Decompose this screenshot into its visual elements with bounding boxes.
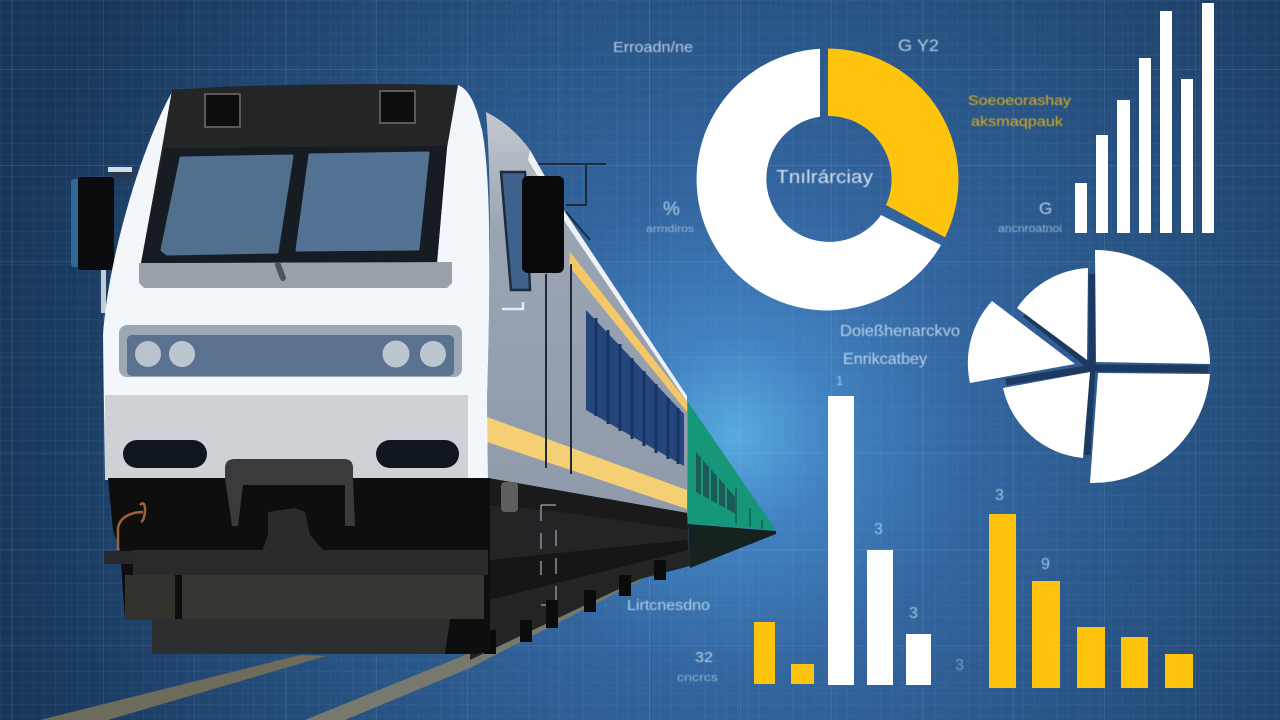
label: percent left of donut: %	[663, 199, 680, 220]
bar value labels: 3	[995, 487, 1004, 504]
donut chart	[697, 48, 958, 310]
train illustration	[71, 84, 776, 660]
bar value labels: 3	[874, 521, 883, 538]
yellow callout: Soeoeorashay	[968, 92, 1071, 108]
label: bottom value: 32	[695, 649, 713, 666]
donut: yellow segment	[828, 48, 958, 237]
label: left of top bar chart: G	[1039, 199, 1052, 218]
windscreen panel	[139, 84, 458, 288]
donut centre label: Tnılrárciay	[776, 167, 873, 187]
bottom centre bar chart	[754, 396, 931, 685]
top right bar chart	[1075, 3, 1214, 233]
lead carriage side	[486, 112, 687, 513]
label: bottom value: cncrcs	[677, 672, 719, 684]
label: bottom centre: Lirtcnesdno	[627, 597, 710, 614]
bar value labels: 1	[836, 373, 843, 388]
bar value labels: 3	[955, 657, 964, 674]
cab front body	[103, 85, 489, 480]
lower front lamps	[123, 440, 459, 468]
undercarriage side	[470, 478, 690, 660]
yellow callout	[968, 92, 1071, 129]
donut: white segment	[697, 49, 941, 310]
bumper and underframe front	[104, 459, 490, 654]
bottom right yellow bar chart	[989, 514, 1193, 688]
label: pie chart caption: Enrikcatbey	[843, 351, 927, 368]
bar value labels: 3	[909, 605, 918, 622]
pantograph arm	[532, 164, 606, 240]
left wing mirror	[71, 167, 133, 313]
label: pie chart caption: Doießhenarckvo	[840, 323, 960, 340]
label: bottom value	[677, 649, 719, 684]
label: top of donut left: Erroadn/ne	[613, 39, 693, 56]
label: top of donut right: G Y2	[898, 36, 939, 55]
side cab window and right mirror	[501, 172, 564, 309]
label: percent left of donut	[646, 199, 694, 235]
label: left of top bar chart	[998, 199, 1062, 235]
green carriages	[688, 402, 776, 568]
label: pie chart caption	[840, 323, 960, 368]
headlight housing	[119, 325, 462, 377]
label: left of top bar chart: ancnroatnoi	[998, 223, 1062, 235]
bar value labels: 9	[1041, 556, 1050, 573]
pie chart	[968, 250, 1210, 483]
side windows	[586, 310, 684, 466]
bar value labels	[836, 373, 1050, 674]
rail tracks	[40, 578, 640, 720]
label: percent left of donut: arrndiros	[646, 224, 694, 235]
yellow callout: aksmaqpauk	[971, 113, 1064, 129]
